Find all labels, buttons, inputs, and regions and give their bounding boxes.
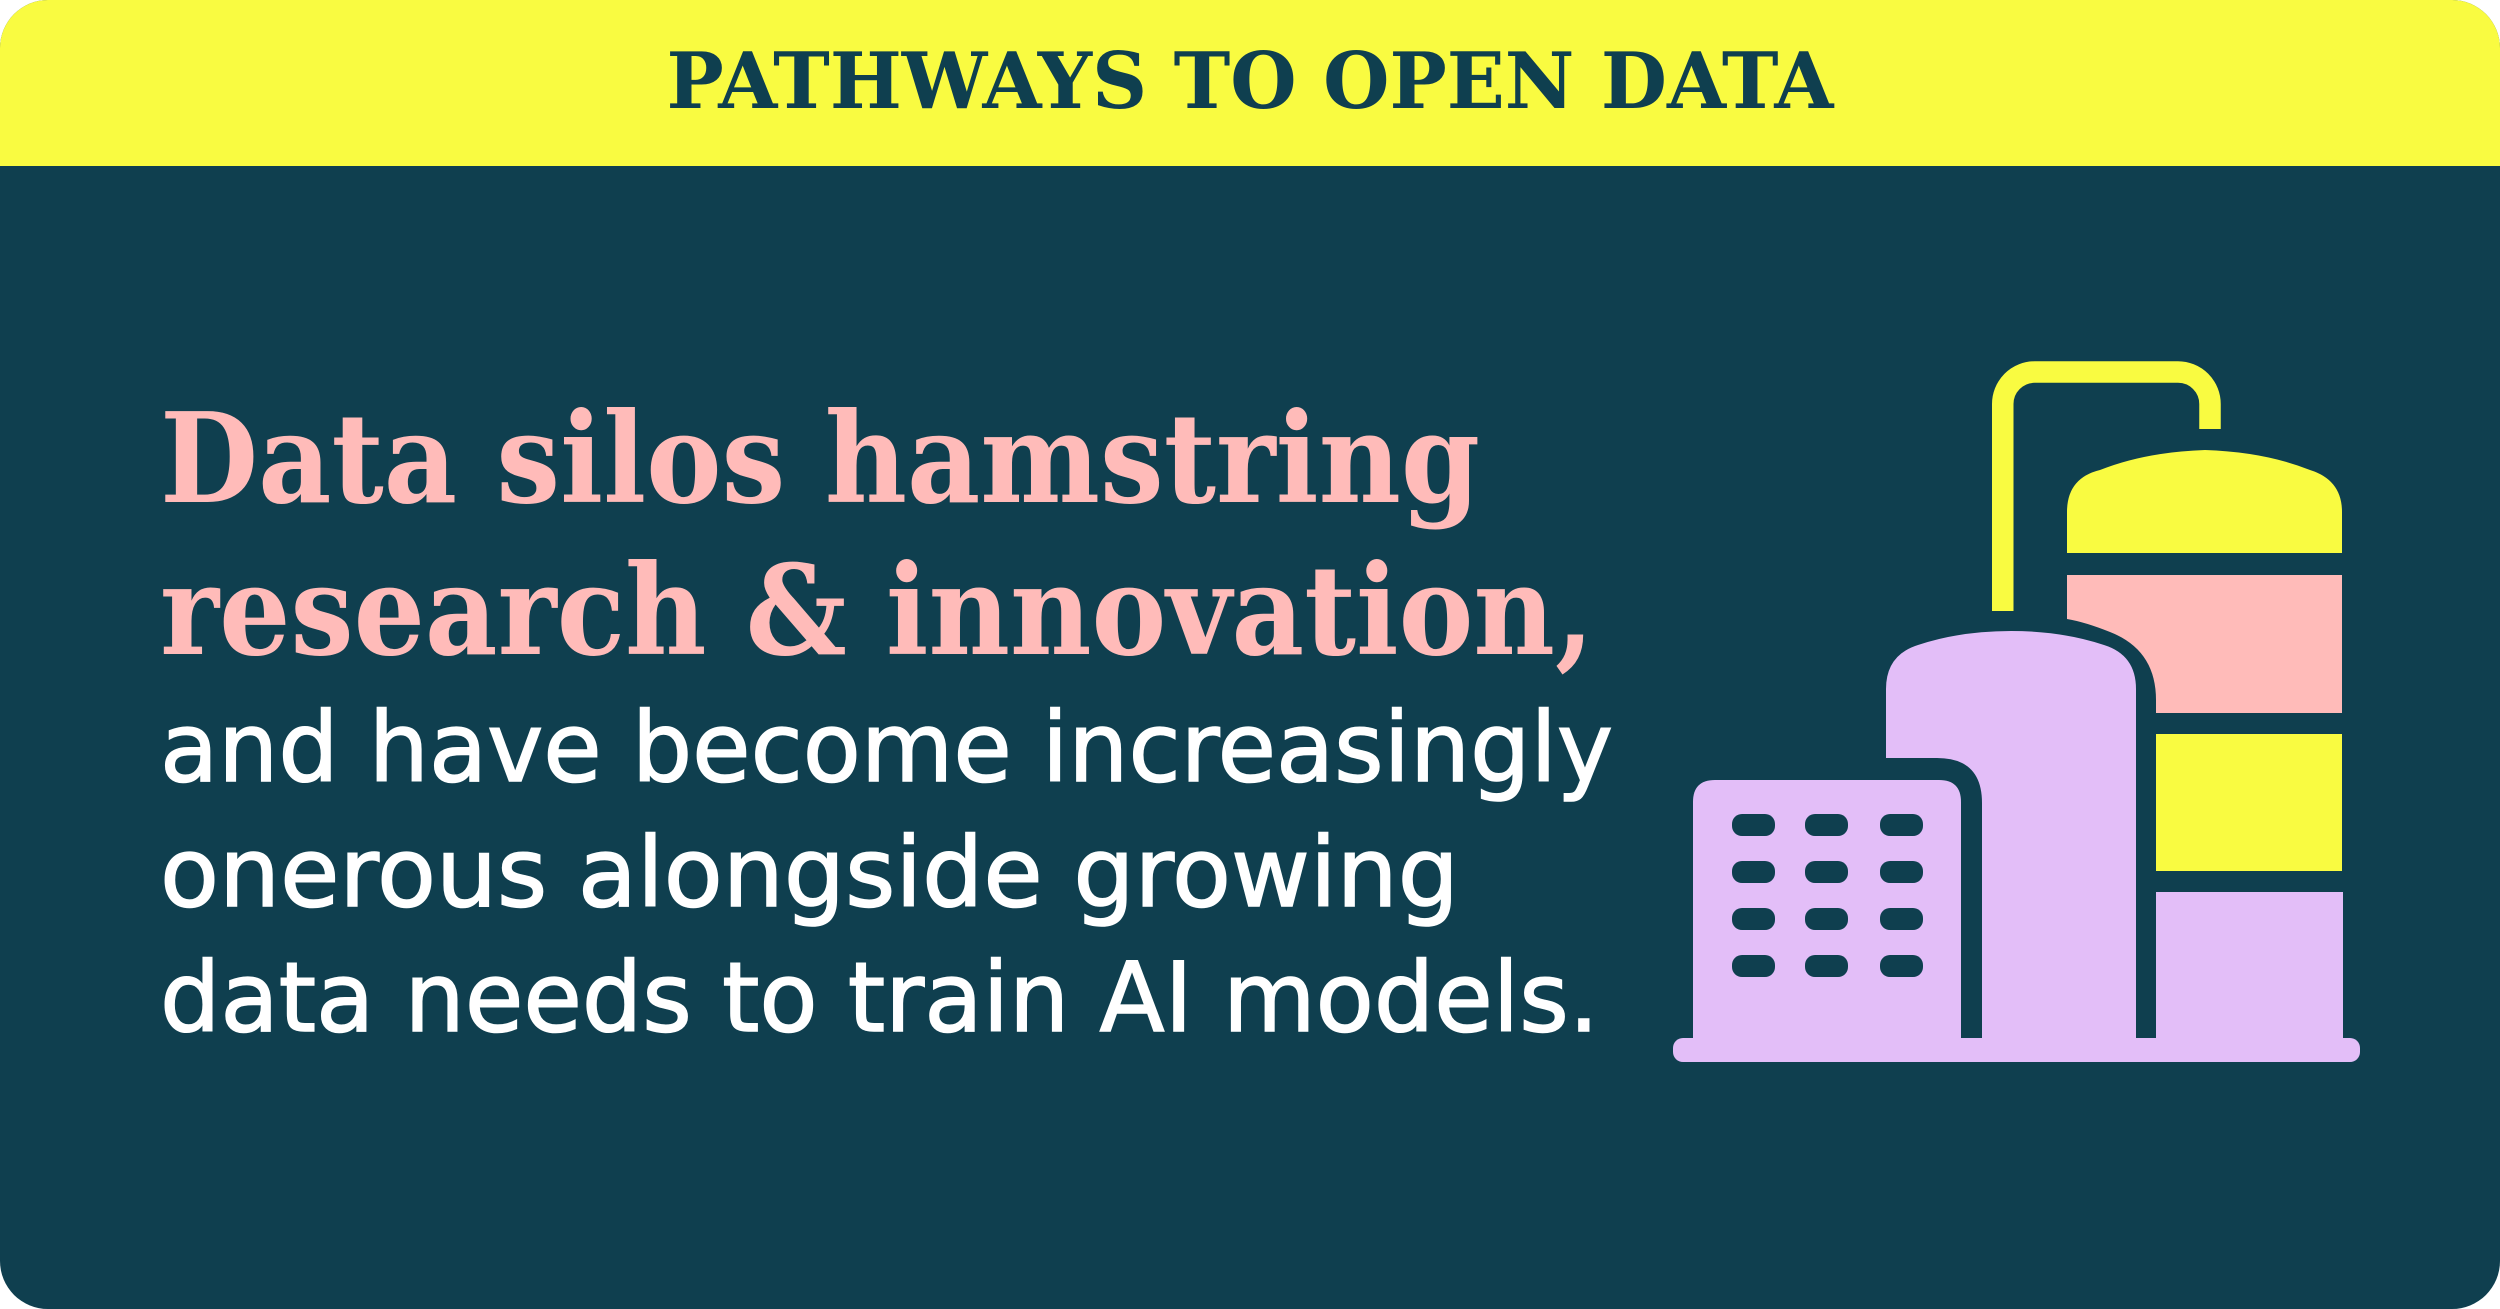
title: PATHWAYS TO OPEN DATA	[666, 36, 1835, 127]
heading: pink: Data silos hamstring	[160, 386, 1480, 532]
base	[1673, 1038, 2360, 1062]
heading: pink: research & innovation,	[160, 538, 1594, 684]
left building	[1693, 780, 1961, 1038]
middle tank	[1886, 631, 2136, 1038]
icon: industrial plant	[1673, 372, 2360, 1062]
body text: data needs to train AI models.	[160, 942, 1599, 1054]
body text: onerous alongside growing	[160, 817, 1459, 929]
body text: and have become increasingly	[160, 692, 1613, 804]
pipe	[2003, 372, 2210, 611]
body text	[160, 692, 1613, 1054]
right tank	[2067, 450, 2343, 1038]
heading: pink	[160, 386, 1594, 684]
